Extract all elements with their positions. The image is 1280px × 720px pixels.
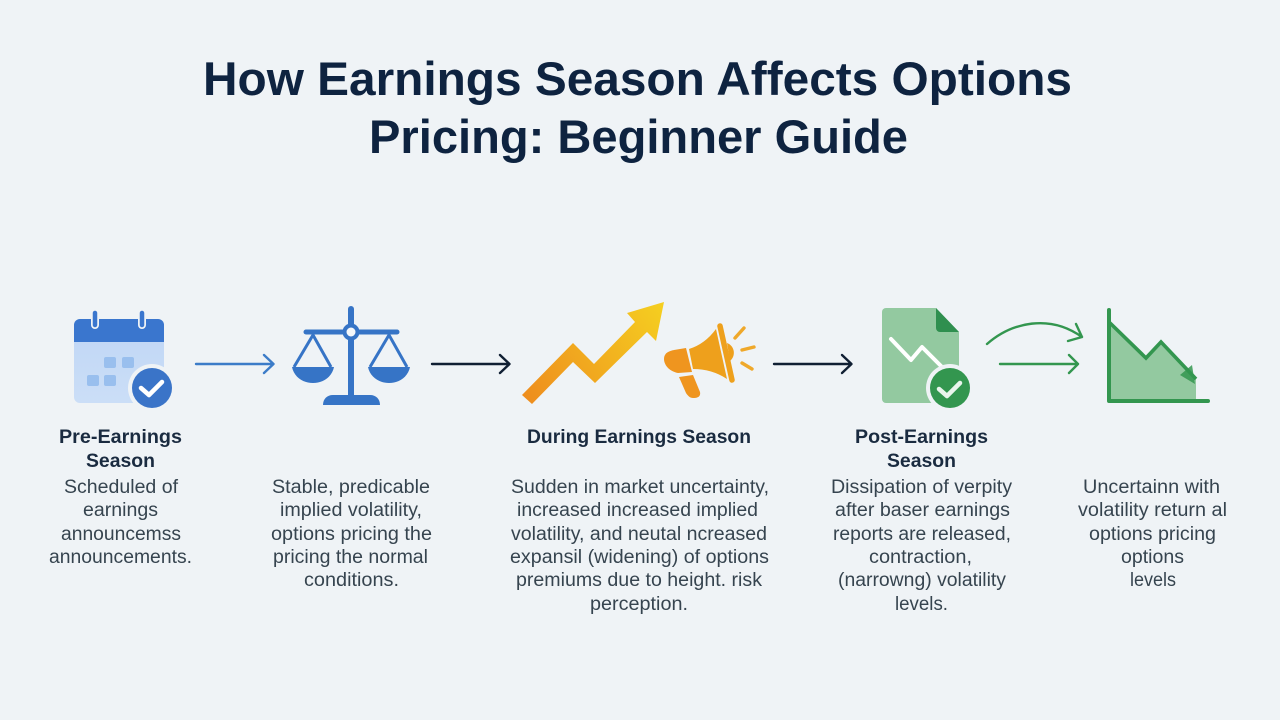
text block: volatility returns: volatility return al	[1078, 500, 1227, 521]
text block: during earnings season	[510, 427, 769, 615]
text block: pre-earnings season: Pre-Earnings	[59, 427, 182, 448]
text block: volatility returns: options pricing	[1089, 524, 1216, 545]
text block: post-earnings season: Dissipation of verpity	[831, 477, 1013, 498]
text block: stable implied volatility: implied volatility,	[280, 500, 422, 521]
text block: pre-earnings season: earnings	[83, 500, 158, 521]
arrow: megaphone to document	[774, 355, 852, 373]
text block: during earnings season: premiums due to height. risk	[516, 570, 763, 591]
arrow: scale to chart	[432, 355, 510, 373]
text block: post-earnings season: after baser earnings	[835, 500, 1010, 521]
text block: during earnings season: increased increased implied	[517, 500, 758, 521]
text block: volatility returns: Uncertainn with	[1083, 477, 1220, 498]
text block: post-earnings season: contraction,	[869, 547, 972, 568]
arrow: calendar to scale	[196, 355, 274, 373]
text block: during earnings season: Sudden in market uncertainty,	[511, 477, 769, 498]
icon: falling area chart	[1109, 310, 1208, 401]
title: Pricing: Beginner Guide	[369, 110, 908, 163]
icon: megaphone	[664, 326, 754, 398]
text block: stable implied volatility: pricing the normal	[273, 547, 428, 568]
text block: during earnings season: perception.	[590, 594, 688, 615]
text block: post-earnings season: levels.	[895, 594, 948, 615]
icon: calendar with check	[74, 313, 176, 412]
text block: post-earnings season	[831, 427, 1013, 615]
title: How Earnings Season Affects Options	[203, 52, 1072, 105]
text block: during earnings season: expansil (widening) of options	[510, 547, 769, 568]
text block: stable implied volatility	[271, 477, 432, 591]
text block: post-earnings season: (narrowng) volatility	[838, 570, 1006, 591]
text block: volatility returns: options	[1121, 547, 1184, 568]
text block: post-earnings season: Post-Earnings	[855, 427, 988, 448]
text block: stable implied volatility: conditions.	[304, 570, 399, 591]
text block: post-earnings season: reports are released,	[833, 524, 1011, 545]
icon: report with falling line and check	[882, 308, 974, 412]
text block: stable implied volatility: options pricing the	[271, 524, 432, 545]
text block: pre-earnings season: Scheduled of	[64, 477, 179, 498]
text block: post-earnings season: Season	[887, 451, 956, 472]
title	[203, 52, 1072, 163]
icon: balance scale	[292, 309, 410, 405]
text block: volatility returns: levels	[1130, 570, 1176, 591]
text block: pre-earnings season: announcements.	[49, 547, 192, 568]
text block: stable implied volatility: Stable, predicable	[272, 477, 430, 498]
icon: rising arrow	[522, 302, 664, 404]
text block: during earnings season: During Earnings Season	[527, 427, 751, 448]
text block: pre-earnings season: Season	[86, 451, 155, 472]
text block: volatility returns	[1078, 477, 1227, 591]
arrow: curved and straight green arrows	[987, 323, 1082, 373]
text block: during earnings season: volatility, and neutal ncreased	[511, 524, 767, 545]
text block: pre-earnings season	[49, 427, 192, 568]
text block: pre-earnings season: announcemss	[61, 524, 181, 545]
